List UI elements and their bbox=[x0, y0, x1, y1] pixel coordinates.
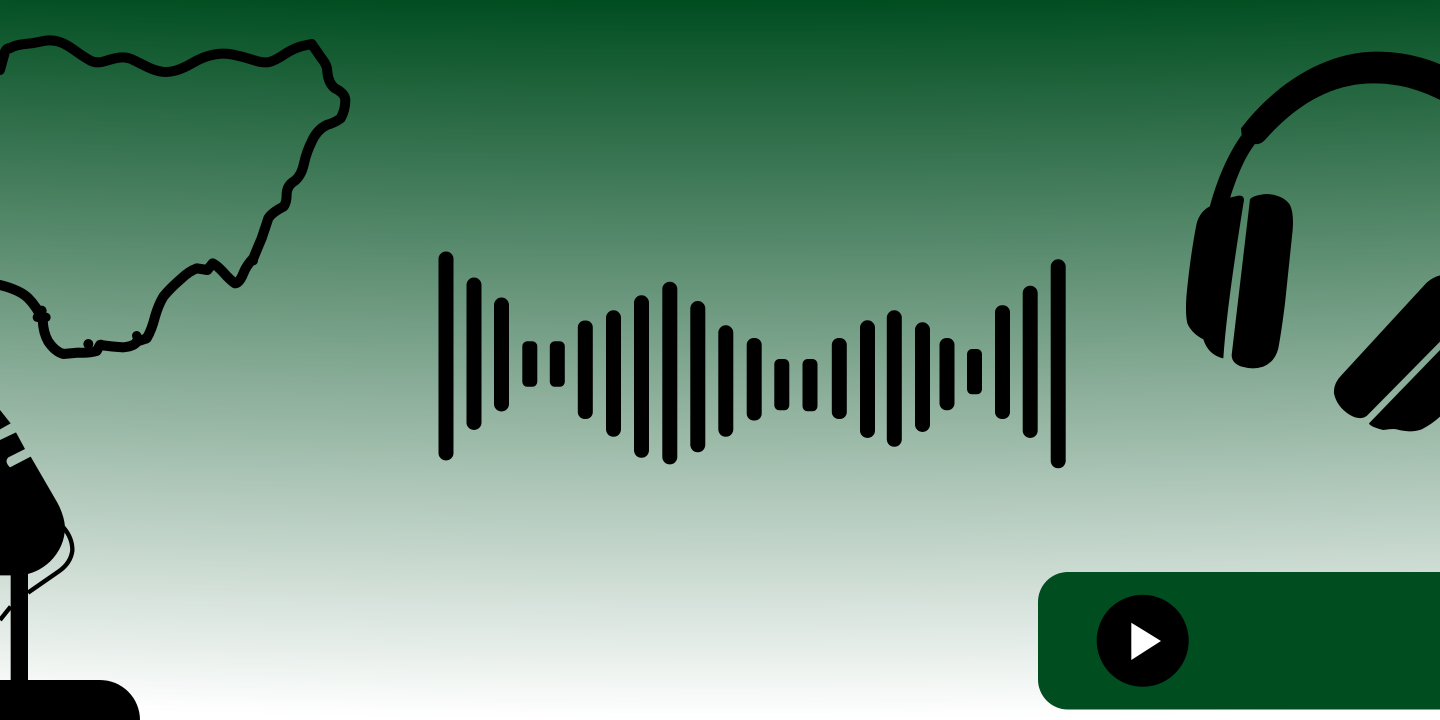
left outer ear cup bbox=[1186, 196, 1244, 358]
stand pole bbox=[11, 570, 28, 683]
play button circle bbox=[1097, 595, 1189, 687]
icon: headphones bbox=[1186, 52, 1440, 431]
icon: play triangle bbox=[1131, 623, 1161, 660]
right ear pad bbox=[1334, 275, 1440, 418]
player background bbox=[1038, 572, 1440, 710]
microphone grille tip bbox=[0, 410, 11, 429]
microphone body with band and slot bbox=[0, 432, 65, 575]
sound waveform bbox=[438, 252, 1066, 468]
icon: outline map of Nigeria bbox=[0, 40, 345, 354]
icon: microphone on stand bbox=[0, 410, 140, 720]
left ear pad bbox=[1232, 194, 1293, 368]
headband bbox=[1209, 52, 1440, 208]
player bar bbox=[1038, 572, 1440, 710]
coastline bumps bbox=[33, 256, 258, 349]
stand base bbox=[0, 680, 140, 720]
microphone cable bbox=[0, 527, 72, 620]
right outer ear cup bbox=[1369, 348, 1440, 431]
